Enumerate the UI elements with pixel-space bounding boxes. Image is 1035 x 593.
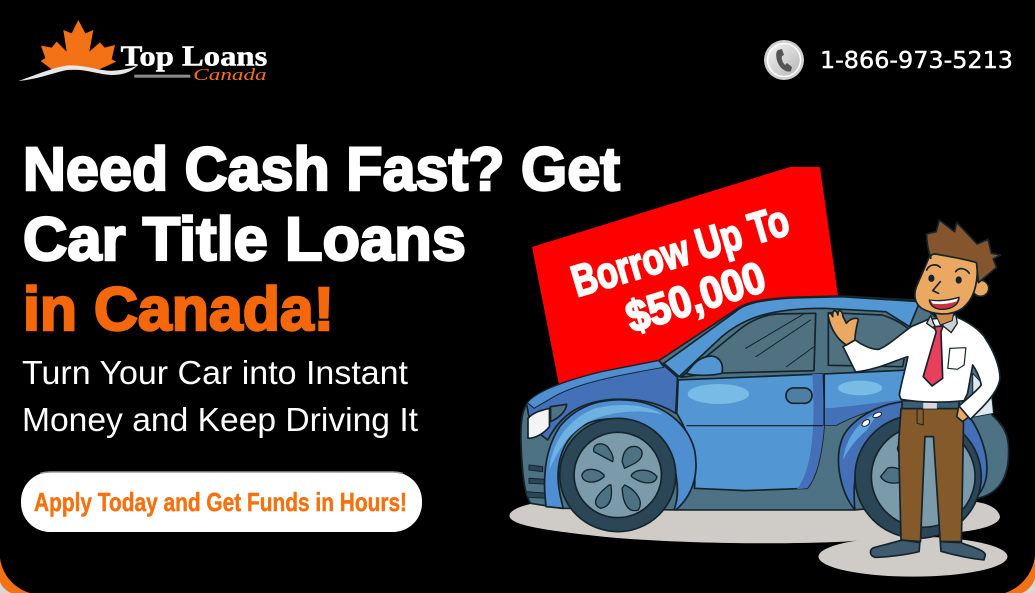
red sign: [532, 167, 840, 390]
belt: [902, 401, 959, 409]
shirt: [843, 317, 1000, 419]
subheading line 1: Turn Your Car into Instant: [22, 354, 408, 391]
headlight: [528, 408, 549, 438]
icon: swoosh: [18, 65, 138, 81]
ear: [972, 280, 989, 296]
face: [915, 253, 977, 314]
corner: bottom left: [0, 558, 30, 593]
headlight hood: [551, 404, 567, 422]
pocket hand: [957, 405, 969, 422]
ground shadow: [509, 502, 1008, 577]
rear fender: [838, 402, 987, 510]
eyes: [928, 275, 962, 284]
neck: [935, 312, 954, 325]
rear wheel: [855, 415, 981, 538]
front window: [681, 313, 816, 377]
logo: [18, 20, 267, 84]
rear door shade: [825, 400, 902, 425]
heading line 2: Car Title Loans: [23, 205, 466, 273]
logo rule: [134, 75, 190, 78]
illustration: [509, 220, 1009, 577]
waving hand: [828, 311, 858, 345]
front grille: [526, 465, 548, 498]
call to action button: [21, 472, 422, 532]
front fender: [545, 400, 696, 510]
door handle: [786, 388, 812, 403]
wing mirror: [686, 356, 722, 375]
subheading line 2: Money and Keep Driving It: [22, 401, 418, 438]
roof: [664, 297, 920, 377]
hood: [527, 361, 677, 440]
front door: [677, 374, 824, 491]
front window reflections: [746, 314, 814, 367]
icon: maple leaf: [41, 20, 116, 71]
logo name: Top Loans: [121, 41, 267, 73]
icon: phone: [764, 40, 804, 80]
fender lights: [862, 412, 882, 426]
door crease: [687, 424, 823, 428]
fly: [917, 409, 923, 425]
shirt pocket: [948, 348, 966, 369]
logo subtitle: Canada: [193, 65, 267, 84]
car body: [521, 296, 1009, 510]
corner: bottom right: [1005, 556, 1035, 593]
shoes: [870, 540, 985, 560]
hood highlight: [527, 361, 664, 408]
belt buckle: [923, 403, 937, 409]
teeth: [931, 298, 958, 304]
collar: [927, 314, 957, 333]
rear window: [828, 313, 910, 367]
heading line 1: Need Cash Fast? Get: [23, 135, 620, 203]
phone number: 1-866-973-5213: [820, 48, 1013, 74]
sign line 2: $50,000: [620, 253, 771, 343]
fender highlight: [549, 405, 664, 470]
heading line 3: in Canada!: [23, 275, 334, 343]
rear door: [824, 370, 910, 425]
door highlight: [688, 384, 749, 404]
tie: [923, 326, 943, 386]
mouth: [929, 297, 959, 309]
heading: [23, 135, 620, 343]
rear door highlight: [838, 381, 882, 395]
call to action button: Apply Today and Get Funds in Hours!: [34, 487, 407, 517]
tail light: [973, 373, 994, 417]
brows and nose: [927, 265, 969, 293]
rear fender highlight: [843, 412, 879, 460]
trousers: [899, 408, 963, 542]
front wheel: [560, 418, 676, 532]
front wheel spokes: [582, 444, 657, 511]
car: [521, 296, 1009, 538]
sign line 1: Borrow Up To: [566, 196, 795, 307]
salesman: [828, 220, 1000, 560]
hair: [927, 220, 1000, 283]
door dark edge: [797, 374, 824, 489]
subheading: [22, 354, 418, 438]
